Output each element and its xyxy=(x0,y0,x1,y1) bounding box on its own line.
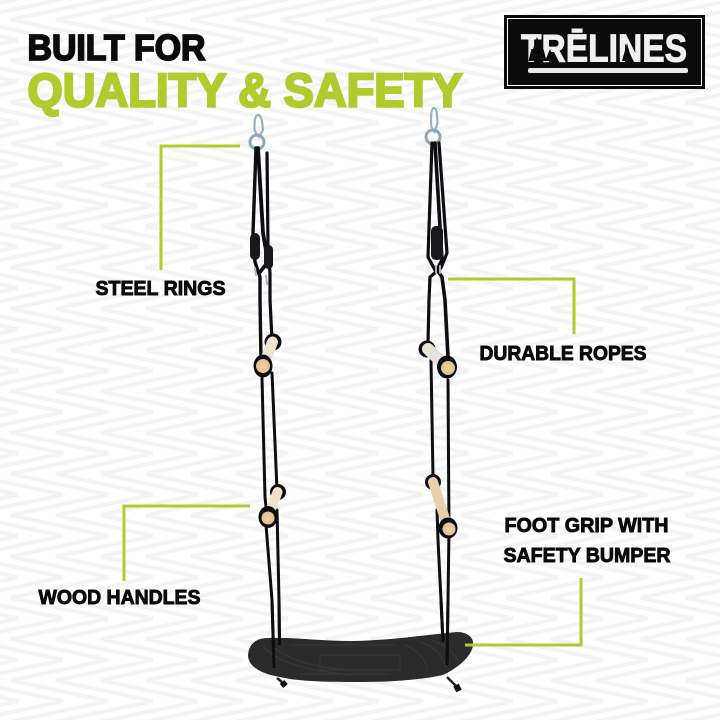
right hook and ring xyxy=(426,108,440,144)
callout: steel rings xyxy=(96,146,240,300)
callout: foot grip: SAFETY BUMPER xyxy=(504,545,671,567)
callout: wood handles: WOOD HANDLES xyxy=(38,587,200,609)
wood handle lower left xyxy=(258,484,286,528)
logo: Trelines xyxy=(504,15,705,89)
wood handle lower right xyxy=(425,474,458,538)
heading: built for: BUILT FOR xyxy=(28,27,206,68)
callout: wood handles xyxy=(38,506,250,609)
logo: Trelines: TRĒLINES xyxy=(521,28,687,70)
callout: steel rings: STEEL RINGS xyxy=(96,278,226,300)
heading: quality and safety: QUALITY & SAFETY xyxy=(28,64,462,116)
callout: durable ropes: DURABLE ROPES xyxy=(480,343,646,365)
left ropes xyxy=(250,148,280,668)
wood handle upper left xyxy=(254,334,282,378)
swing product xyxy=(248,108,473,691)
callout: durable ropes xyxy=(448,279,646,365)
callout: foot grip xyxy=(465,515,671,645)
seat xyxy=(248,600,473,691)
title xyxy=(28,27,462,116)
logo trees xyxy=(528,37,632,61)
callout: foot grip: FOOT GRIP WITH xyxy=(504,515,668,537)
wood handle upper right xyxy=(418,340,457,378)
left hook and ring xyxy=(250,115,264,149)
right ropes xyxy=(428,143,449,665)
